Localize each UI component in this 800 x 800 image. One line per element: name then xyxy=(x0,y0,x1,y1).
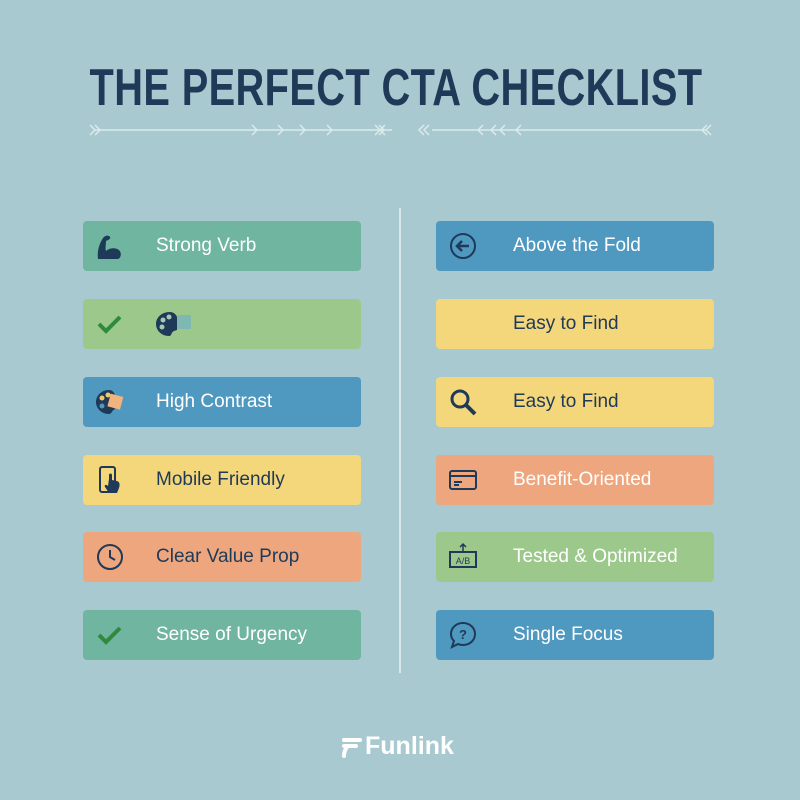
decorative arrow line xyxy=(90,124,712,136)
item: Easy to Find: Easy to Find xyxy=(513,313,619,334)
item: Easy to Find (search) xyxy=(436,377,714,427)
item: Benefit-Oriented xyxy=(436,455,714,505)
item: Strong Verb: Strong Verb xyxy=(156,235,256,256)
item: High Contrast: High Contrast xyxy=(156,391,272,412)
icon: phone tap xyxy=(99,466,120,493)
item: Easy to Find (search): Easy to Find xyxy=(513,391,619,412)
item: Single Focus: Single Focus xyxy=(513,624,623,645)
item: Tested & Optimized xyxy=(436,532,714,582)
icon: clock xyxy=(97,544,123,570)
item: Tested & Optimized: Tested & Optimized xyxy=(513,546,678,567)
item: Mobile Friendly xyxy=(83,455,361,505)
icon: check xyxy=(98,626,122,645)
item: Sense of Urgency xyxy=(83,610,361,660)
icon: palette xyxy=(96,390,124,414)
item: Benefit-Oriented: Benefit-Oriented xyxy=(513,469,651,490)
item: Above the Fold: Above the Fold xyxy=(513,235,641,256)
item: check palette xyxy=(83,299,361,349)
icon: check xyxy=(98,316,122,334)
item: Clear Value Prop: Clear Value Prop xyxy=(156,546,299,567)
divider xyxy=(399,208,400,673)
item: Clear Value Prop xyxy=(83,532,361,582)
item: Above the Fold xyxy=(436,221,714,271)
icon: palette xyxy=(156,312,191,336)
item: Strong Verb xyxy=(83,221,361,271)
title: THE PERFECT CTA CHECKLIST xyxy=(90,59,702,117)
icon: magnifier xyxy=(450,390,476,416)
icon: A/B xyxy=(449,543,477,568)
icon: arm xyxy=(98,236,121,259)
item: Mobile Friendly: Mobile Friendly xyxy=(156,469,285,490)
item: Easy to Find xyxy=(436,299,714,349)
icon: speech question xyxy=(450,622,476,649)
icon: card xyxy=(449,470,477,490)
icon: A/B: A/B xyxy=(456,556,470,566)
item: Single Focus xyxy=(436,610,714,660)
item: Sense of Urgency: Sense of Urgency xyxy=(156,624,307,645)
item: High Contrast xyxy=(83,377,361,427)
logo: Funlink: Funlink xyxy=(365,732,454,760)
icon: arrow circle xyxy=(450,233,476,259)
icon: speech question: ? xyxy=(459,627,467,642)
